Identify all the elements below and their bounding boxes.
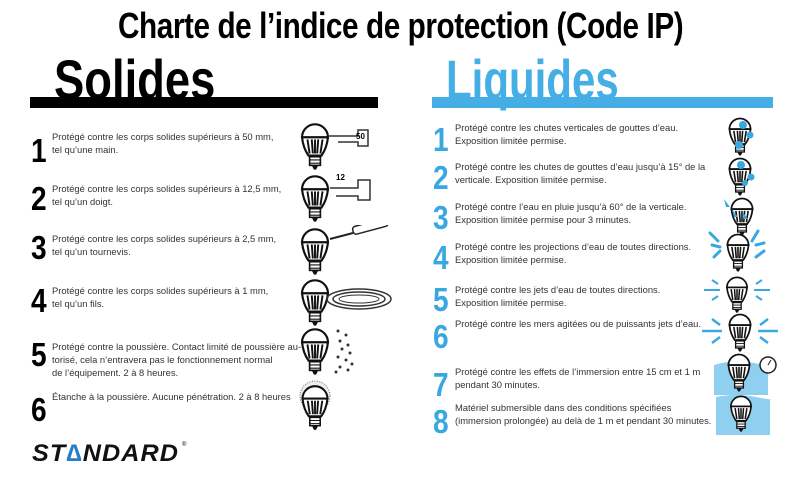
solid 4: 4 [31,282,47,319]
solid 5: Protégé contre la poussière. Contact limité de poussière au- [52,341,301,352]
solid 6 [31,380,330,430]
liquid 2: 2 [433,159,449,196]
liquid 2: verticale. Exposition limitée permise. [455,174,607,185]
solid 2: Protégé contre les corps solides supérieurs à 12,5 mm, [52,183,281,194]
solid 3: Protégé contre les corps solides supérieurs à 2,5 mm, [52,233,276,244]
liquid 4: Protégé contre les projections d’eau de toutes directions. [455,241,691,252]
liquid 7: Protégé contre les effets de l’immersion entre 15 cm et 1 m [455,366,700,377]
solid 6: Étanche à la poussière. Aucune pénétration. 2 à 8 heures [52,391,291,402]
liquid 2 [433,158,754,196]
solid 1: tel qu’une main. [52,144,118,155]
liquid 4: 4 [433,239,449,276]
heading: Solides: Solides [54,48,215,111]
solid 4: tel qu’un fils. [52,298,104,309]
liquid 8: Matériel submersible dans des conditions spécifiées [455,402,671,413]
heading: Liquides: Liquides [446,48,619,111]
solid 2: tel qu’un doigt. [52,196,113,207]
liquid 1: Exposition limitée permise. [455,135,567,146]
liquid 8 [433,395,772,440]
heading: Solides [30,48,378,111]
solid 1: 50 [356,132,365,141]
solid 2 [31,173,371,222]
liquid 7 [433,354,777,403]
liquid 5: 5 [433,281,449,318]
heading: Liquides [432,48,773,111]
solid 3: 3 [31,229,47,266]
liquid 7: pendant 30 minutes. [455,379,540,390]
liquid 6 [433,314,778,355]
solid 4: Protégé contre les corps solides supérieurs à 1 mm, [52,285,268,296]
solid 3 [31,225,388,275]
liquid 3: Protégé contre l’eau en pluie jusqu’à 60° de la verticale. [455,201,687,212]
liquid 7: 7 [433,366,449,403]
solid 1: Protégé contre les corps solides supérieurs à 50 mm, [52,131,273,142]
liquid 4: Exposition limitée permise. [455,254,567,265]
liquid 8: 8 [433,403,449,440]
panel: solides [31,123,392,430]
solid 1: 1 [31,132,47,169]
solid 3: tel qu’un tournevis. [52,246,131,257]
liquid 5: Exposition limitée permise. [455,297,567,308]
liquid 6: Protégé contre les mers agitées ou de puissants jets d’eau. [455,318,701,329]
title: Charte de l’indice de protection (Code IP) [118,5,683,46]
liquid 1: 1 [433,121,449,158]
solid 1 [31,123,369,170]
logo: STANDARD: ST∆NDARD [32,440,179,467]
liquid 1: Protégé contre les chutes verticales de gouttes d’eau. [455,122,678,133]
solid 6: 6 [31,391,47,428]
solid 2: 12 [336,173,345,182]
solid 5: torisé, cela n’entravera pas le fonctionnement normal [52,354,272,365]
logo: STANDARD: ® [182,442,186,448]
liquid 5 [433,276,770,318]
solid 4 [31,279,392,326]
solid 5 [31,328,354,378]
liquid 3 [433,198,754,236]
liquid 3: 3 [433,199,449,236]
solid 5: 5 [31,336,47,373]
panel: liquides [433,118,778,440]
solid 5: de l’équipement. 2 à 8 heures. [52,367,178,378]
liquid 4 [433,229,766,276]
solid 2: 2 [31,180,47,217]
liquid 2: Protégé contre les chutes de gouttes d’eau jusqu’à 15° de la [455,161,705,172]
liquid 6: 6 [433,318,449,355]
liquid 8: (immersion prolongée) au delà de 1 m et pendant 30 minutes. [455,415,711,426]
liquid 1 [433,118,754,158]
liquid 3: Exposition limitée permise pour 3 minutes. [455,214,631,225]
liquid 5: Protégé contre les jets d’eau de toutes directions. [455,284,660,295]
